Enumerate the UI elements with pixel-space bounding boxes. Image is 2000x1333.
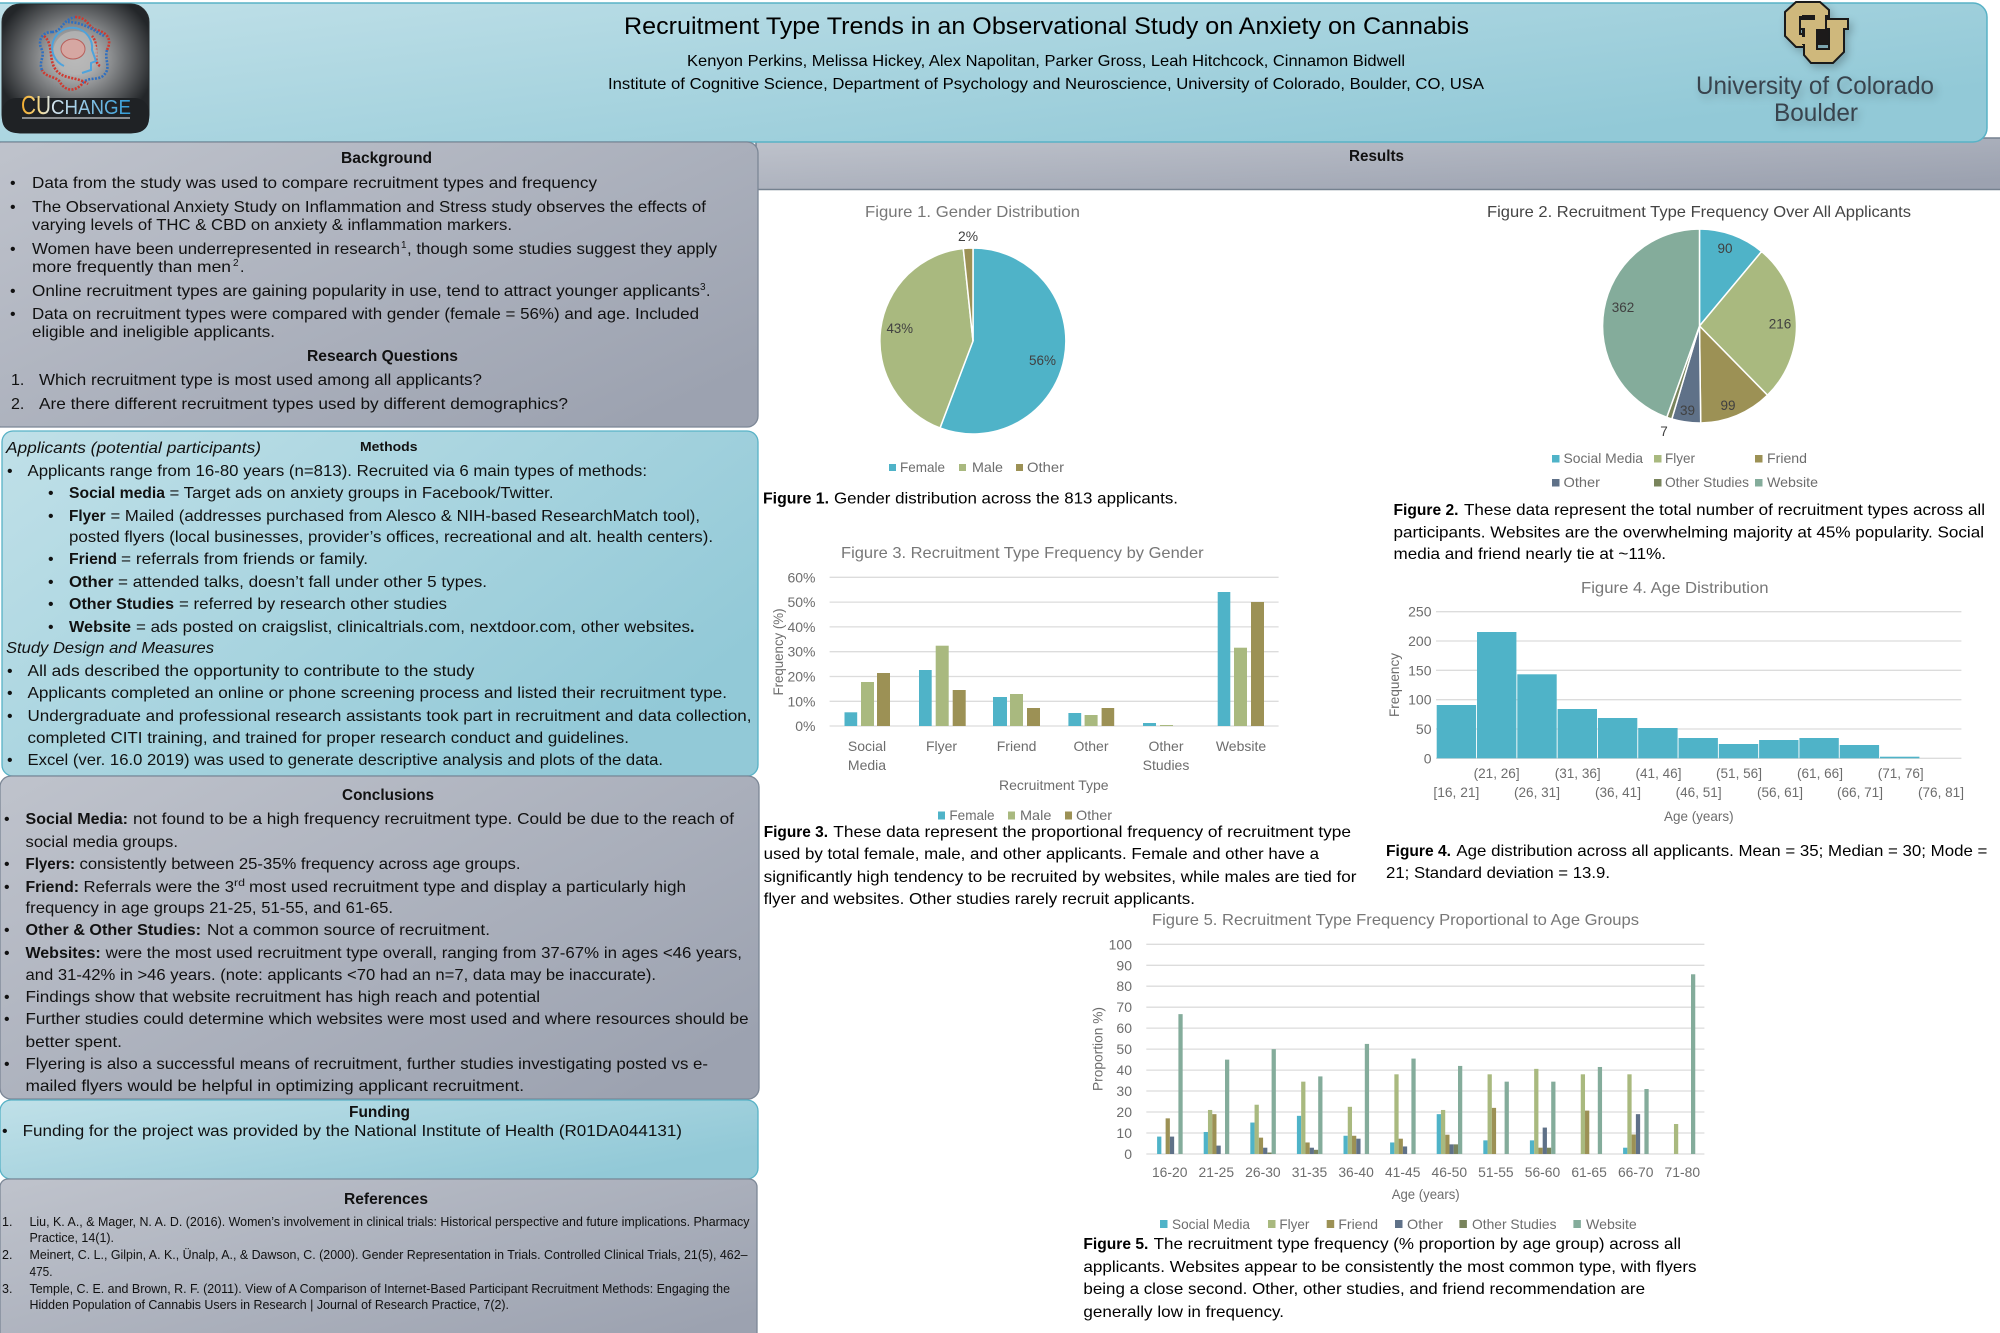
text block: applicants bullets: posted flyers (local businesses, provider’s offices, recreational and alt. health centers). xyxy=(69,529,713,546)
legend xyxy=(938,807,1112,823)
legend: Other xyxy=(1407,1216,1443,1232)
x axis labels: Friend xyxy=(997,738,1036,754)
legend: Social Media xyxy=(1172,1216,1250,1232)
text block: conclusions bullets: Findings show that website recruitment has high reach and potential xyxy=(26,989,540,1006)
text block: study design bullets: • xyxy=(7,708,13,725)
y axis ticks: 50 xyxy=(1116,1041,1132,1057)
x axis labels: Website xyxy=(1216,738,1266,754)
text block: conclusions bullets: Flyering is also a successful means of recruitment, further studies investigating posted vs e- xyxy=(26,1056,708,1073)
y axis label: Frequency xyxy=(1386,653,1402,717)
logo: University of Colorado Boulder: Boulder xyxy=(1774,99,1858,127)
data labels: 216 xyxy=(1769,316,1791,332)
x axis bin labels: (41, 46] xyxy=(1636,765,1682,781)
text block: study design bullets: Undergraduate and professional research assistants took part in recruitment and data collection, xyxy=(28,708,751,725)
caption: figure 2: Figure 2. xyxy=(1394,502,1458,519)
text block: applicants bullets: • xyxy=(48,574,54,591)
y axis ticks: 0% xyxy=(795,718,816,734)
text block: conclusions bullets: • xyxy=(4,945,10,962)
x axis bin labels: (36, 41] xyxy=(1595,784,1641,800)
text block: background bullets: Online recruitment types are gaining popularity in use, tend to attract younger applicants xyxy=(32,283,700,300)
text block: background bullets: • xyxy=(10,199,16,216)
text block: applicants bullets: Social media xyxy=(69,485,165,502)
x axis labels: Other xyxy=(1148,738,1184,754)
legend: Female xyxy=(949,807,995,823)
x axis labels: 36-40 xyxy=(1338,1164,1374,1180)
legend: Friend xyxy=(1338,1216,1378,1232)
logo: University of Colorado Boulder xyxy=(1696,2,1934,127)
text block: background bullets: The Observational Anxiety Study on Inflammation and Stress study observes the effects of xyxy=(32,199,707,216)
text block: funding: • xyxy=(2,1123,8,1140)
chart title: Figure 3. Recruitment Type Frequency by Gender xyxy=(841,545,1204,562)
x axis labels: 71-80 xyxy=(1665,1164,1700,1180)
text block: references list xyxy=(2,1215,750,1312)
heading: methods: Methods xyxy=(360,439,418,454)
wordmark: University of Colorado xyxy=(1696,72,1934,100)
y axis ticks: 50 xyxy=(1416,721,1432,737)
legend: Female xyxy=(900,459,945,475)
text block: applicants bullets: • xyxy=(48,485,54,502)
y axis ticks: 20% xyxy=(787,668,816,684)
bars xyxy=(844,592,1264,726)
caption: figure 3: flyer and websites. Other studies rarely recruit applicants. xyxy=(764,891,1195,908)
x axis title: Age (years) xyxy=(1664,808,1734,824)
text block: background bullets: • xyxy=(10,175,16,192)
x axis bin labels: (31, 36] xyxy=(1555,765,1601,781)
y axis ticks: 70 xyxy=(1116,999,1132,1015)
text block: background bullets: • xyxy=(10,241,16,258)
x axis labels: Flyer xyxy=(926,738,957,754)
caption: figure 3: used by total female, male, and other applicants. Female and other have a xyxy=(764,846,1319,863)
legend: Male xyxy=(972,459,1003,475)
head outline xyxy=(52,28,96,73)
x axis labels: Studies xyxy=(1143,757,1189,773)
text block: applicants bullets: . xyxy=(690,619,694,636)
text block: conclusions bullets: • xyxy=(4,811,10,828)
caption: figure 5 xyxy=(1083,1236,1697,1321)
data labels: 39 xyxy=(1680,403,1695,418)
text block: conclusions bullets: Flyers: xyxy=(26,856,75,873)
text block: references list: Liu, K. A., & Mager, N. A. D. (2016). Women’s involvement in clinical trials: Historical perspective and future implications. Pharmacy xyxy=(30,1215,750,1229)
x axis labels xyxy=(848,738,1266,773)
panel: references xyxy=(0,1179,757,1333)
text block: applicants bullets: Other Studies xyxy=(69,596,174,613)
panel: funding xyxy=(0,1100,758,1179)
text block: references list: Practice, 14(1). xyxy=(30,1231,114,1245)
text block: background bullets: eligible and ineligible applicants. xyxy=(32,324,275,341)
x axis bin labels: (66, 71] xyxy=(1837,784,1883,800)
text block: research questions: Which recruitment type is most used among all applicants? xyxy=(39,372,482,389)
text block: references list: 475. xyxy=(30,1265,52,1279)
data labels: 362 xyxy=(1612,300,1634,315)
y axis ticks: 250 xyxy=(1408,604,1432,620)
x axis bin labels: (56, 61] xyxy=(1757,784,1803,800)
x axis bin labels: (61, 66] xyxy=(1797,765,1843,781)
text block: applicants bullets: = Mailed (addresses purchased from Alesco & NIH-based ResearchMatch tool), xyxy=(110,508,700,525)
text block: conclusions bullets: Social Media: xyxy=(26,811,128,828)
text block: conclusions bullets: were the most used recruitment type overall, ranging from 37-67% in ages <46 years, xyxy=(105,945,742,962)
text block: research questions: 2. xyxy=(11,396,24,413)
text block: applicants bullets: Applicants range from 16-80 years (n=813). Recruited via 6 main types of methods: xyxy=(28,463,647,480)
text block: references list: 1. xyxy=(2,1215,12,1229)
text block: background bullets: 2 xyxy=(233,258,239,269)
logo: CU Change: CU xyxy=(21,90,51,120)
icon: CU interlocking letters xyxy=(1785,2,1848,63)
affiliation: Institute of Cognitive Science, Department of Psychology and Neuroscience, University of Colorado, Boulder, CO, USA xyxy=(608,76,1484,93)
text block: background bullets: Women have been underrepresented in research xyxy=(32,241,400,258)
caption: figure 5: applicants. Websites appear to be consistently the most common type, with flyers xyxy=(1083,1259,1697,1276)
x axis bin labels: (51, 56] xyxy=(1716,765,1762,781)
x axis labels: 41-45 xyxy=(1385,1164,1421,1180)
results header bar: Results xyxy=(1349,148,1404,165)
y axis ticks: 200 xyxy=(1408,633,1432,649)
x axis labels: Social xyxy=(848,738,886,754)
text block: references list: 3. xyxy=(2,1282,12,1296)
text block: study design bullets: Excel (ver. 16.0 2019) was used to generate descriptive analysis and plots of the data. xyxy=(28,752,663,769)
caption: figure 3: These data represent the proportional frequency of recruitment type xyxy=(833,824,1351,841)
text block: conclusions bullets: Websites: xyxy=(26,945,101,962)
caption: figure 4: Figure 4. xyxy=(1386,843,1451,860)
text block: conclusions bullets: • xyxy=(4,1056,10,1073)
panel: background and research questions xyxy=(0,142,758,427)
y axis ticks: 60 xyxy=(1116,1020,1132,1036)
text block: conclusions bullets: Friend: xyxy=(26,879,79,896)
legend: Other Studies xyxy=(1472,1216,1556,1232)
text block: conclusions bullets xyxy=(4,811,749,1095)
text block: references list: 2. xyxy=(2,1248,12,1262)
text block: references list: Meinert, C. L., Gilpin, A. K., Ünalp, A., & Dawson, C. (2000). Gender Representation in Trials. Controlled Clinical Trials, 21(5), 462– xyxy=(30,1248,748,1262)
text block: study design bullets: completed CITI training, and trained for proper research conduct and guidelines. xyxy=(28,730,629,747)
text block: study design bullets: • xyxy=(7,752,13,769)
x axis labels: Other xyxy=(1073,738,1109,754)
text block: conclusions bullets: • xyxy=(4,879,10,896)
text block: applicants bullets: = Target ads on anxiety groups in Facebook/Twitter. xyxy=(170,485,554,502)
x axis labels: 61-65 xyxy=(1571,1164,1607,1180)
y axis ticks: 40% xyxy=(787,619,816,635)
text block: conclusions bullets: Further studies could determine which websites were most used and where resources should be xyxy=(26,1011,749,1028)
text block: background bullets: 1 xyxy=(401,240,407,251)
chart: figure 3 frequency by gender xyxy=(770,545,1279,823)
text block: research questions xyxy=(11,372,568,413)
text block: conclusions bullets: better spent. xyxy=(26,1034,122,1051)
x axis labels: 51-55 xyxy=(1478,1164,1514,1180)
legend: Website xyxy=(1767,474,1818,490)
grouped bars xyxy=(1157,974,1695,1154)
x axis labels: 66-70 xyxy=(1618,1164,1654,1180)
pie slices xyxy=(880,248,1066,434)
legend: Friend xyxy=(1767,450,1807,466)
data labels: 56% xyxy=(1029,353,1056,368)
text block: study design bullets: Applicants completed an online or phone screening process and listed their recruitment type. xyxy=(28,685,727,702)
y axis ticks: 0 xyxy=(1124,1146,1132,1162)
x axis labels: 16-20 xyxy=(1152,1164,1188,1180)
caption: figure 2: These data represent the total number of recruitment types across all xyxy=(1464,502,1985,519)
y axis ticks: 150 xyxy=(1408,662,1432,678)
text block: applicants bullets: = referrals from friends or family. xyxy=(121,551,368,568)
text block: conclusions bullets: most used recruitment type and display a particularly high xyxy=(249,879,686,896)
authors: Kenyon Perkins, Melissa Hickey, Alex Napolitan, Parker Gross, Leah Hitchcock, Cinnamon Bidwell xyxy=(687,53,1405,70)
y axis ticks: 100 xyxy=(1408,692,1432,708)
chart: figure 1 gender pie xyxy=(865,204,1080,475)
y axis ticks: 10 xyxy=(1116,1125,1132,1141)
caption: figure 1: Gender distribution across the 813 applicants. xyxy=(834,490,1178,508)
caption: figure 3: significantly high tendency to be recruited by websites, while males are tied for xyxy=(764,869,1357,886)
y axis label: Frequency (%) xyxy=(770,608,786,696)
x axis bin labels: [16, 21] xyxy=(1433,784,1479,800)
text block: background bullets: more frequently than men xyxy=(32,259,231,276)
y axis ticks: 60% xyxy=(787,570,816,586)
text block: conclusions bullets: and 31-42% in >46 years. (note: applicants <70 had an n=7, data may be inaccurate). xyxy=(26,967,656,984)
subheading: study design: Study Design and Measures xyxy=(6,640,214,657)
x axis bin labels: (46, 51] xyxy=(1676,784,1722,800)
x axis bin labels: (71, 76] xyxy=(1878,765,1924,781)
caption: figure 4: 21; Standard deviation = 13.9. xyxy=(1386,865,1610,882)
caption: figure 2 xyxy=(1394,502,1985,563)
caption: figure 1: Figure 1. xyxy=(763,490,829,508)
y axis ticks: 100 xyxy=(1109,936,1132,952)
text block: study design bullets: • xyxy=(7,685,13,702)
y axis ticks: 90 xyxy=(1116,957,1132,973)
x axis bin labels xyxy=(1433,765,1964,800)
heading: references: References xyxy=(344,1191,428,1208)
chart title: Figure 5. Recruitment Type Frequency Proportional to Age Groups xyxy=(1152,912,1639,929)
data labels: 99 xyxy=(1720,398,1736,413)
legend: Social Media xyxy=(1564,450,1643,466)
logo: CU Change xyxy=(2,4,149,133)
y axis ticks xyxy=(787,570,816,734)
text block: background bullets xyxy=(10,175,717,341)
text block: applicants bullets: • xyxy=(7,463,13,480)
x axis labels xyxy=(1152,1164,1700,1180)
y axis ticks xyxy=(1109,936,1132,1162)
text block: study design bullets: • xyxy=(7,663,13,680)
caption: figure 5: being a close second. Other, other studies, and friend recommendation are xyxy=(1083,1281,1645,1298)
text block: conclusions bullets: not found to be a high frequency recruitment type. Could be due to the reach of xyxy=(133,811,735,828)
text block: applicants bullets: Other xyxy=(69,574,114,591)
text block: applicants bullets: Friend xyxy=(69,551,117,568)
pie slices xyxy=(1603,229,1797,423)
data labels: 7 xyxy=(1660,424,1668,439)
legend: Flyer xyxy=(1665,450,1695,466)
text block: background bullets: Data on recruitment types were compared with gender (female = 56%) and age. Included xyxy=(32,306,699,323)
legend: Other xyxy=(1076,807,1112,823)
heading: background: Background xyxy=(341,150,432,167)
caption: figure 2: media and friend nearly tie at ~11%. xyxy=(1394,546,1666,563)
legend: Website xyxy=(1586,1216,1637,1232)
heading: conclusions: Conclusions xyxy=(342,787,434,804)
legend xyxy=(889,459,1064,475)
text block: applicants bullets: = referred by research other studies xyxy=(179,596,447,613)
panel: methods xyxy=(2,431,758,776)
x axis bin labels: (26, 31] xyxy=(1514,784,1560,800)
histogram bars xyxy=(1437,632,1919,758)
text block: background bullets: . xyxy=(240,259,244,276)
heading: funding: Funding xyxy=(349,1104,410,1121)
subheading: applicants: Applicants (potential participants) xyxy=(5,440,261,457)
caption: figure 5: generally low in frequency. xyxy=(1083,1304,1284,1321)
chart: figure 5 proportion by age group xyxy=(1090,912,1704,1232)
y axis ticks: 10% xyxy=(787,693,816,709)
y axis ticks: 40 xyxy=(1116,1062,1132,1078)
text block: applicants bullets: • xyxy=(48,508,54,525)
data labels: 2% xyxy=(958,229,978,244)
heading: research questions: Research Questions xyxy=(307,348,458,365)
text block: conclusions bullets: Referrals were the 3 xyxy=(84,879,234,896)
text block: applicants bullets: Flyer xyxy=(69,508,106,525)
x axis bin labels: (76, 81] xyxy=(1918,784,1964,800)
results header bar xyxy=(756,138,2000,190)
data labels xyxy=(1612,241,1791,439)
text block: funding: Funding for the project was provided by the National Institute of Health (R01DA044131) xyxy=(23,1123,682,1140)
chart: figure 4 age histogram xyxy=(1386,580,1964,824)
text block: applicants bullets: = attended talks, doesn’t fall under other 5 types. xyxy=(118,574,487,591)
x axis title: Age (years) xyxy=(1392,1186,1460,1202)
legend xyxy=(1552,450,1818,490)
legend: Other Studies xyxy=(1665,474,1749,490)
x axis labels: 31-35 xyxy=(1292,1164,1327,1180)
chart title: Figure 2. Recruitment Type Frequency Over All Applicants xyxy=(1487,204,1911,221)
y axis ticks: 0 xyxy=(1424,750,1432,766)
y axis ticks: 50% xyxy=(787,594,816,610)
text block: conclusions bullets: • xyxy=(4,989,10,1006)
x axis labels: 56-60 xyxy=(1525,1164,1560,1180)
text block: conclusions bullets: frequency in age groups 21-25, 51-55, and 61-65. xyxy=(26,900,393,917)
text block: conclusions bullets: mailed flyers would be helpful in optimizing applicant recruitment. xyxy=(26,1078,524,1095)
text block: background bullets: • xyxy=(10,306,16,323)
logo: CU Change: CHANGE xyxy=(51,97,131,119)
text block: background bullets: . xyxy=(706,283,710,300)
y axis ticks: 20 xyxy=(1116,1104,1132,1120)
text block: references list: Hidden Population of Cannabis Users in Research | Journal of Research Practice, 7(2). xyxy=(30,1298,509,1312)
text block: background bullets: varying levels of THC & CBD on anxiety & inflammation markers. xyxy=(32,217,512,234)
caption: figure 3 xyxy=(764,824,1357,908)
text block: background bullets: 3 xyxy=(700,282,706,293)
text block: applicants bullets: • xyxy=(48,619,54,636)
caption: figure 2: participants. Websites are the overwhelming majority at 45% popularity. Social xyxy=(1394,524,1984,542)
text block: applicants bullets: = ads posted on craigslist, clinicaltrials.com, nextdoor.com, other websites xyxy=(136,619,690,636)
x axis labels: 21-25 xyxy=(1199,1164,1234,1180)
text block: conclusions bullets: • xyxy=(4,856,10,873)
caption: figure 3: Figure 3. xyxy=(764,824,828,841)
text block: references list: Temple, C. E. and Brown, R. F. (2011). View of A Comparison of Internet-Based Participant Recruitment Methods: Engaging the xyxy=(30,1282,730,1296)
chart: figure 2 recruitment pie xyxy=(1487,204,1911,490)
legend: Other xyxy=(1027,459,1064,475)
text block: conclusions bullets: consistently between 25-35% frequency across age groups. xyxy=(80,856,520,873)
legend: Male xyxy=(1020,807,1052,823)
text block: applicants bullets: • xyxy=(48,596,54,613)
y axis ticks: 30% xyxy=(787,644,816,660)
x axis labels: 26-30 xyxy=(1245,1164,1281,1180)
text block: applicants bullets xyxy=(7,463,713,636)
header banner xyxy=(0,3,1987,142)
x axis labels: Media xyxy=(848,757,886,773)
text block: study design bullets: All ads described the opportunity to contribute to the study xyxy=(28,663,474,680)
panel: conclusions xyxy=(0,776,759,1099)
legend: Other xyxy=(1564,474,1600,490)
x axis bin labels: (21, 26] xyxy=(1474,765,1520,781)
x axis labels: 46-50 xyxy=(1432,1164,1467,1180)
text block: conclusions bullets: social media groups. xyxy=(26,834,178,851)
text block: conclusions bullets: Other & Other Studies: xyxy=(26,922,201,939)
caption: figure 4 xyxy=(1386,843,1987,882)
title: Recruitment Type Trends in an Observational Study on Anxiety on Cannabis xyxy=(624,13,1469,40)
caption: figure 5: The recruitment type frequency (% proportion by age group) across all xyxy=(1154,1236,1681,1253)
text block: applicants bullets: Website xyxy=(69,619,131,636)
text block: background bullets: • xyxy=(10,283,16,300)
y axis ticks: 30 xyxy=(1116,1083,1132,1099)
caption: figure 5: Figure 5. xyxy=(1083,1236,1148,1253)
y axis ticks: 80 xyxy=(1116,978,1132,994)
y axis label: Proportion %) xyxy=(1090,1007,1106,1091)
chart title: Figure 1. Gender Distribution xyxy=(865,204,1080,221)
text block: conclusions bullets: rd xyxy=(234,878,245,889)
text block: conclusions bullets: • xyxy=(4,1011,10,1028)
chart title: Figure 4. Age Distribution xyxy=(1581,580,1769,597)
x axis title: Recruitment Type xyxy=(999,777,1109,793)
text block: applicants bullets: • xyxy=(48,551,54,568)
text block: research questions: 1. xyxy=(11,372,24,389)
text block: background bullets: , though some studies suggest they apply xyxy=(407,241,717,258)
legend xyxy=(1160,1216,1637,1232)
text block: research questions: Are there different recruitment types used by different demographics? xyxy=(39,396,568,413)
legend: Flyer xyxy=(1279,1216,1310,1232)
data labels: 43% xyxy=(886,321,913,336)
text block: background bullets: Data from the study was used to compare recruitment types and frequency xyxy=(32,175,597,192)
caption: figure 4: Age distribution across all applicants. Mean = 35; Median = 30; Mode = xyxy=(1456,843,1987,860)
y axis ticks xyxy=(1408,604,1432,766)
text block: conclusions bullets: Not a common source of recruitment. xyxy=(207,922,490,939)
text block: study design bullets xyxy=(7,663,751,769)
text block: conclusions bullets: • xyxy=(4,922,10,939)
data labels: 90 xyxy=(1717,241,1733,256)
data labels xyxy=(886,229,1056,368)
